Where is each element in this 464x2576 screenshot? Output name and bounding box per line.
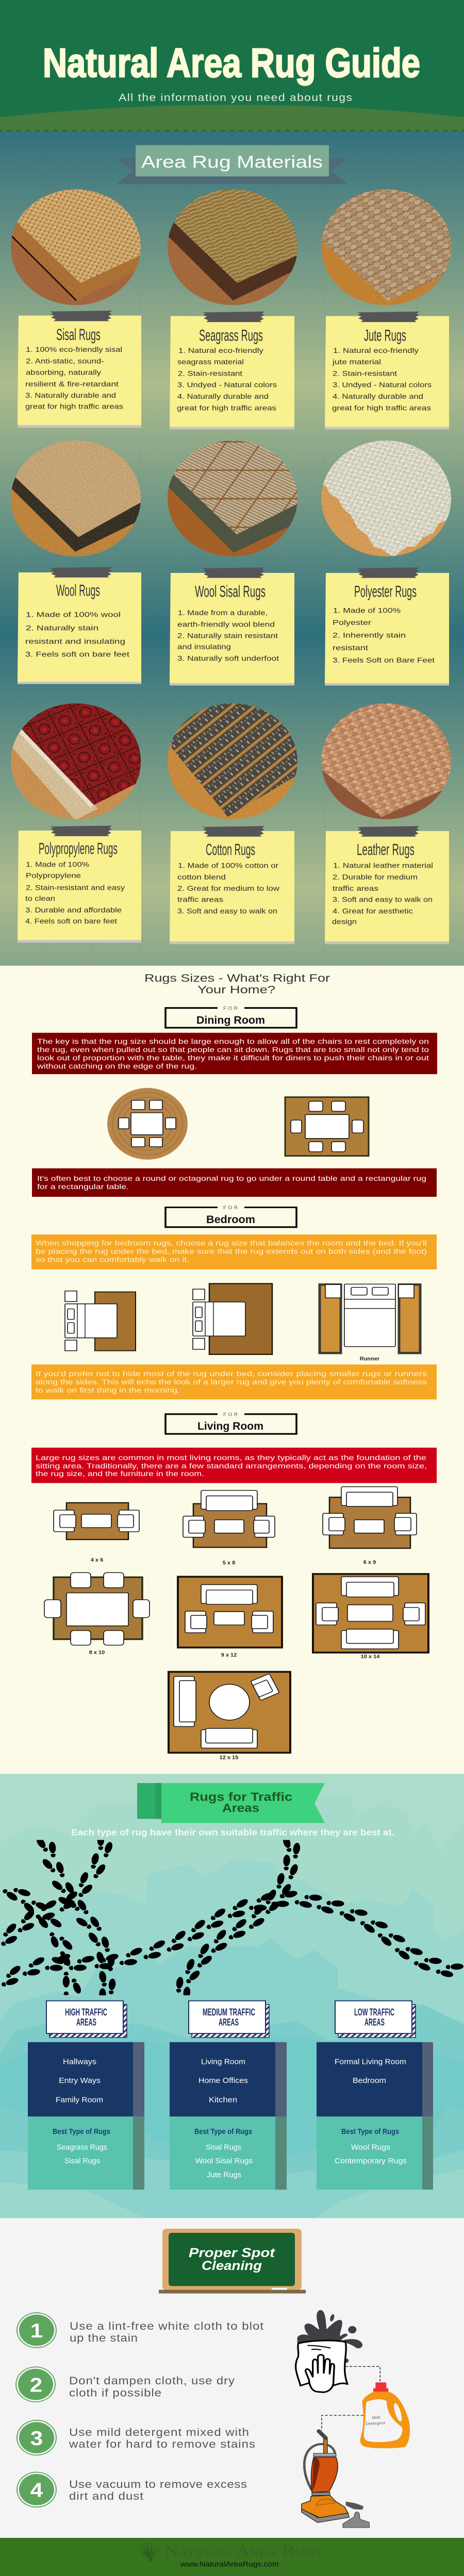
note: jute rugs: jute material	[332, 358, 381, 366]
step 2: Don't dampen cloth, use dry	[69, 2374, 235, 2387]
panel: proper spot cleaning	[0, 2218, 464, 2538]
diagram: 4 x 6: 4 x 6	[91, 1558, 103, 1563]
card label: low traffic: LOW TRAFFIC	[354, 2007, 394, 2018]
note: cotton rugs: 2. Great for medium to low	[177, 885, 279, 893]
note: sisal rugs: absorbing, naturally	[26, 368, 101, 377]
note: seagrass rugs: great for high traffic areas	[177, 404, 276, 412]
diagram: 5 x 8	[183, 1490, 275, 1566]
note: leather rugs: traffic areas	[333, 885, 378, 893]
note: wool rugs	[18, 567, 141, 684]
panel: area rug materials	[0, 129, 464, 965]
card: medium traffic areas: Sisal Rugs	[206, 2143, 241, 2151]
note: wool rugs: resistant and insulating	[25, 637, 125, 646]
note: polypropylene rugs	[18, 825, 141, 943]
step 2: cloth if possible	[69, 2386, 161, 2399]
note: wool sisal rugs: earth-friendly wool blend	[177, 620, 275, 629]
note: leather rugs: Leather Rugs	[357, 841, 415, 859]
note: sisal rugs	[18, 311, 141, 428]
card: high traffic areas: Seagrass Rugs	[57, 2143, 107, 2151]
callout: dining room sizing: The key is that the rug size should be large enough to allow all of the chairs to rest completely on	[37, 1038, 429, 1046]
note: seagrass rugs: 2. Stain-resistant	[178, 369, 243, 378]
card: low traffic areas: Wool Rugs	[351, 2143, 390, 2151]
note: leather rugs: 3. Soft and easy to walk on	[333, 895, 433, 904]
diagram: 12 x 15	[169, 1672, 290, 1760]
callout: dining room sizing: without catching on the edge of the rug.	[37, 1062, 197, 1071]
diagram: bedroom rug large	[193, 1284, 272, 1354]
card label: low traffic: AREAS	[364, 2017, 385, 2028]
diagram: 4 x 6	[54, 1503, 139, 1563]
note: wool rugs: Wool Rugs	[56, 582, 100, 600]
note: seagrass rugs	[170, 312, 294, 430]
card label: medium traffic: AREAS	[219, 2017, 239, 2028]
note: seagrass rugs: 4. Naturally durable and	[177, 393, 269, 401]
note: polyester rugs: 3. Feels Soft on Bare Feet	[333, 656, 435, 665]
note: wool sisal rugs	[170, 567, 294, 685]
subtitle: All the information you need about rugs	[119, 91, 352, 104]
icon: detergent bottle	[360, 2382, 410, 2448]
diagram: round rug with table	[107, 1088, 188, 1160]
callout: living room sizing: the rug size, and the furniture in the room.	[36, 1470, 204, 1478]
diagram: bedroom runners: Runner	[360, 1357, 379, 1362]
card: medium traffic areas: Jute Rugs	[207, 2171, 241, 2179]
heading ribbon: area rug materials	[117, 145, 348, 184]
step 4: 4	[30, 2479, 43, 2501]
note: wool sisal rugs: 2. Naturally stain resistant	[177, 632, 278, 640]
label: dining room: FOR	[223, 1006, 238, 1011]
note: polyester rugs: resistant	[333, 644, 369, 652]
diagram: rectangular rug with table	[285, 1097, 369, 1156]
card label: high traffic	[46, 2001, 127, 2038]
note: jute rugs: great for high traffic areas	[332, 404, 431, 412]
diagram: 10 x 14: 10 x 14	[361, 1654, 380, 1659]
step 3: Use mild detergent mixed with	[69, 2426, 249, 2438]
card: low traffic areas: Bedroom	[353, 2076, 386, 2085]
icon: stain and cloth	[296, 2310, 362, 2392]
label: bedroom: Bedroom	[206, 1213, 255, 1226]
note: polypropylene rugs: Polypropylene Rugs	[39, 840, 118, 858]
label: living room	[165, 1412, 296, 1434]
note: jute rugs: 1. Natural eco-friendly	[333, 347, 419, 355]
callout: round vs rectangular	[32, 1168, 437, 1197]
note: wool rugs: 1. Made of 100% wool	[26, 611, 121, 619]
card: low traffic areas	[317, 2001, 433, 2190]
label: dining room: Dining Room	[196, 1013, 265, 1026]
callout: round vs rectangular: It's often best to choose a round or octagonal rug to go under a round table and a rectangular rug	[37, 1175, 426, 1183]
callout: bedroom sizing: be placing the rug under the bed, make sure that the rug extends out on both sides (and the foot)	[36, 1247, 427, 1256]
brand name: Natural Area Rugs	[164, 2543, 322, 2559]
note: jute rugs: 2. Stain-resistant	[333, 369, 397, 378]
card: high traffic areas: Sisal Rugs	[64, 2157, 100, 2165]
heading: chalkboard: Cleaning	[202, 2259, 262, 2273]
note: polyester rugs: 1. Made of 100%	[333, 606, 401, 615]
diagram: 10 x 14	[313, 1574, 428, 1659]
heading ribbon: area rug materials: Area Rug Materials	[141, 152, 323, 172]
step 1	[17, 2313, 264, 2348]
note: leather rugs: design	[332, 918, 357, 926]
label: living room: FOR	[223, 1412, 238, 1417]
card: medium traffic areas	[170, 2001, 287, 2190]
card label: low traffic	[335, 2001, 416, 2038]
website: www.NaturalAreaRugs.com	[180, 2560, 279, 2568]
note: polyester rugs: 2. Inherently stain	[333, 632, 406, 640]
note: cotton rugs: 3. Soft and easy to walk on	[177, 907, 277, 916]
photo: polypropylene rug	[10, 703, 141, 821]
step 2: 2	[30, 2374, 42, 2396]
heading ribbon: rugs for traffic areas: Areas	[222, 1802, 259, 1815]
intro text: Each type of rug have their own suitable traffic where they are best at.	[71, 1827, 394, 1838]
header band	[0, 0, 464, 133]
callout: bedroom sizing: When shopping for bedroom rugs, choose a rug size that balances the room and the bed. If you'll	[36, 1239, 427, 1247]
callout: bedroom runners	[31, 1364, 437, 1399]
diagram: 12 x 15: 12 x 15	[220, 1755, 239, 1760]
icon: detergent bottle: Mild	[372, 2415, 380, 2420]
note: polypropylene rugs: 1. Made of 100%	[26, 860, 89, 869]
card: high traffic areas: Best Type of Rugs	[53, 2127, 110, 2136]
note: wool sisal rugs: Wool Sisal Rugs	[195, 583, 266, 601]
photo: polyester rug	[321, 440, 452, 558]
callout: bedroom runners: to walk on first thing in the morning.	[36, 1386, 180, 1395]
callout: living room sizing	[31, 1448, 437, 1483]
step 3	[17, 2420, 255, 2455]
note: wool rugs: 2. Naturally stain	[26, 624, 98, 632]
callout: round vs rectangular: for a rectangular table.	[37, 1183, 129, 1191]
photo: sisal rug	[10, 189, 141, 306]
heading: rug sizes: Rugs Sizes - What's Right For	[144, 972, 330, 984]
heading: rug sizes: Your Home?	[197, 983, 275, 996]
heading ribbon: rugs for traffic areas	[137, 1783, 325, 1823]
card label: high traffic: AREAS	[76, 2017, 96, 2028]
diagram: 9 x 12: 9 x 12	[221, 1653, 237, 1658]
step 1: up the stain	[70, 2331, 138, 2344]
card: medium traffic areas: Home Offices	[198, 2076, 248, 2085]
step 4: Use vacuum to remove excess	[69, 2478, 247, 2490]
label: dining room	[165, 1006, 296, 1028]
photo: wool rug	[10, 440, 141, 558]
callout: dining room sizing: the rug, even when pulled out so that people can sit down. Rugs that are too small not only tend to	[37, 1046, 429, 1054]
diagram: bedroom rug small	[65, 1291, 136, 1351]
note: wool sisal rugs: 3. Naturally soft underfoot	[177, 654, 279, 663]
photo: cotton rug	[167, 703, 298, 821]
step 3: 3	[30, 2427, 43, 2449]
note: seagrass rugs: 1. Natural eco-friendly	[178, 347, 263, 355]
step 4: dirt and dust	[69, 2489, 144, 2502]
callout: bedroom runners: along the sides. This will echo the look of a larger rug and give you plenty of comfortable softness	[36, 1378, 427, 1386]
note: sisal rugs: great for high traffic areas	[25, 402, 123, 411]
icon: vacuum	[302, 2431, 370, 2528]
note: leather rugs	[325, 826, 449, 944]
heading ribbon: rugs for traffic areas: Rugs for Traffic	[190, 1791, 292, 1804]
note: leather rugs: 1. Natural leather material	[333, 861, 433, 870]
note: jute rugs: Jute Rugs	[364, 327, 406, 345]
callout: bedroom sizing	[31, 1234, 437, 1269]
diagram: 9 x 12	[178, 1577, 282, 1658]
note: jute rugs: 4. Naturally durable and	[333, 393, 423, 401]
step 1: 1	[30, 2319, 43, 2342]
callout: bedroom sizing: so that you can comfortably walk on it.	[36, 1256, 189, 1264]
note: cotton rugs: Cotton Rugs	[206, 841, 255, 859]
callout: dining room sizing: look out of proportion with the table, they make it difficult for diners to push their chairs in or out	[37, 1054, 429, 1062]
callout: living room sizing: sitting area. Traditionally, there are a few standard arrangements, depending on the room size,	[36, 1462, 427, 1470]
card: medium traffic areas: Living Room	[201, 2057, 245, 2066]
step 2	[16, 2367, 235, 2402]
callout: dining room sizing	[32, 1033, 437, 1074]
note: seagrass rugs: seagrass material	[177, 358, 244, 366]
panel: rugs for traffic areas	[0, 1774, 464, 2218]
callout: living room sizing: Large rug sizes are common in most living rooms, as they typically act as the foundation of the	[36, 1454, 426, 1462]
label: bedroom	[165, 1206, 296, 1227]
icon: logo plant	[137, 2540, 163, 2561]
card: high traffic areas	[28, 2001, 144, 2190]
step 1: Use a lint-free white cloth to blot	[70, 2319, 264, 2332]
note: seagrass rugs: 3. Undyed - Natural colors	[177, 381, 277, 389]
note: polypropylene rugs: 3. Durable and affordable	[25, 906, 122, 914]
arrows: dashed connectors	[322, 2366, 380, 2430]
note: cotton rugs: traffic areas	[177, 895, 223, 904]
diagram: 6 x 9	[323, 1487, 417, 1565]
card: high traffic areas: Hallways	[63, 2057, 96, 2066]
card: low traffic areas: Best Type of Rugs	[341, 2127, 399, 2136]
note: polypropylene rugs: to clean	[25, 894, 55, 903]
icon: detergent bottle: Detergent	[366, 2421, 386, 2426]
note: jute rugs	[325, 312, 449, 430]
note: leather rugs: 2. Durable for medium	[333, 873, 418, 882]
card: low traffic areas: Contemporary Rugs	[335, 2157, 407, 2165]
note: polyester rugs: Polyester	[333, 619, 371, 627]
heading: rug sizes	[144, 972, 330, 996]
card: low traffic areas: Formal Living Room	[335, 2057, 406, 2066]
note: seagrass rugs: Seagrass Rugs	[199, 327, 263, 345]
note: cotton rugs	[170, 826, 294, 944]
photo: seagrass rug	[167, 189, 298, 306]
note: sisal rugs: resilient & fire-retardant	[25, 380, 119, 388]
card: high traffic areas: Entry Ways	[59, 2076, 101, 2085]
diagram: 8 x 10: 8 x 10	[89, 1650, 105, 1655]
photo: wool sisal rug	[167, 440, 298, 558]
card: high traffic areas: Family Room	[56, 2095, 103, 2104]
diagram: 6 x 9: 6 x 9	[363, 1560, 376, 1565]
diagram: bedroom runners	[320, 1284, 420, 1362]
heading: chalkboard	[159, 2229, 306, 2294]
card: medium traffic areas: Wool Sisal Rugs	[195, 2157, 253, 2165]
note: sisal rugs: 3. Naturally durable and	[25, 392, 116, 400]
diagram: 8 x 10	[44, 1572, 150, 1655]
callout: bedroom runners: If you'd prefer not to hide most of the rug under bed, consider placing smaller rugs or runners	[36, 1370, 427, 1378]
note: cotton rugs: cotton blend	[177, 873, 226, 882]
label: living room: Living Room	[197, 1419, 263, 1432]
card label: high traffic: HIGH TRAFFIC	[65, 2007, 107, 2018]
note: sisal rugs: 1. 100% eco-friendly sisal	[26, 346, 122, 354]
note: polypropylene rugs: 4. Feels soft on bare feet	[25, 917, 118, 925]
note: sisal rugs: 2. Anti-static, sound-	[26, 357, 104, 365]
label: bedroom: FOR	[223, 1206, 238, 1211]
note: polypropylene rugs: Polypropylene	[26, 872, 81, 880]
step 3: water for hard to remove stains	[69, 2437, 255, 2450]
diagram: 5 x 8: 5 x 8	[223, 1561, 235, 1566]
heading: chalkboard: Proper Spot	[189, 2246, 275, 2260]
note: wool rugs: 3. Feels soft on bare feet	[25, 650, 130, 658]
note: jute rugs: 3. Undyed - Natural colors	[333, 381, 432, 389]
card: medium traffic areas: Best Type of Rugs	[194, 2127, 252, 2136]
panel: rug sizes	[0, 965, 464, 1774]
note: leather rugs: 4. Great for aesthetic	[333, 907, 413, 916]
card: medium traffic areas: Kitchen	[209, 2095, 237, 2104]
photo: leather rug	[321, 703, 452, 821]
card label: medium traffic	[189, 2001, 269, 2038]
footer	[0, 2538, 464, 2576]
note: polyester rugs	[325, 567, 449, 685]
note: polypropylene rugs: 2. Stain-resistant and easy	[26, 884, 125, 892]
note: sisal rugs: Sisal Rugs	[56, 326, 101, 344]
note: cotton rugs: 1. Made of 100% cotton or	[178, 861, 278, 870]
step 4	[17, 2472, 247, 2507]
photo: jute rug	[321, 189, 452, 306]
illustration: footprints	[0, 1834, 463, 2007]
note: wool sisal rugs: 1. Made from a durable,	[178, 609, 268, 617]
card label: medium traffic: MEDIUM TRAFFIC	[203, 2007, 255, 2018]
note: wool sisal rugs: and insulating	[177, 643, 231, 651]
